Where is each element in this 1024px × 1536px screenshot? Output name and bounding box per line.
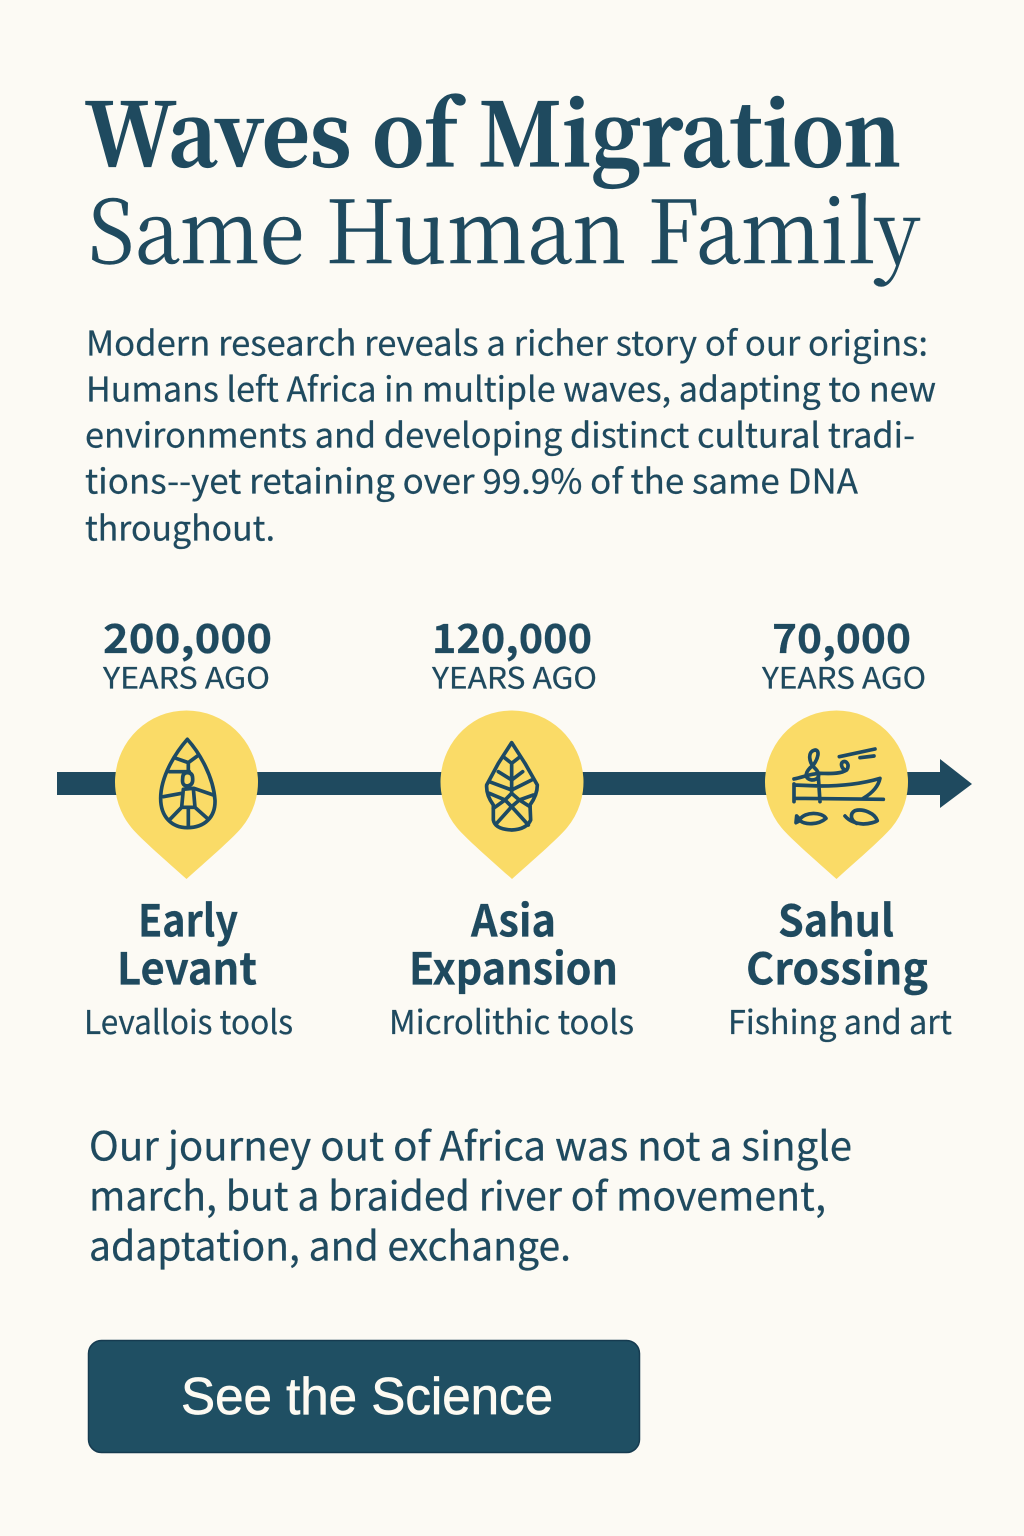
closing statement: adaptation, and exchange. (89, 1214, 571, 1272)
label: Asia Expansion (409, 886, 618, 998)
milestone: Early Levant (84, 607, 293, 1044)
date: 70,000 years ago: YEARS AGO (761, 656, 926, 698)
caption: Microlithic tools: Microlithic tools (389, 996, 634, 1044)
caption: Levallois tools: Levallois tools (84, 996, 293, 1044)
label: Early Levant (117, 886, 257, 998)
closing statement: march, but a braided river of movement, (89, 1164, 826, 1222)
intro text block: Modern research reveals a richer story of our origins: (86, 316, 928, 366)
intro text block (85, 316, 936, 550)
icon: microlithic point (487, 743, 537, 830)
title: Waves of Migration (85, 66, 901, 191)
intro text block: tions--yet retaining over 99.9% of the same DNA (85, 454, 858, 504)
date: 200,000 years ago (102, 607, 272, 698)
pin marker (440, 711, 584, 879)
icon: boat, figure and fish (794, 749, 883, 824)
label: Sahul Crossing: Sahul (778, 886, 894, 950)
closing statement (89, 1114, 852, 1272)
pin marker (115, 711, 258, 879)
title: Same Human Family (88, 163, 921, 288)
intro text block: environments and developing distinct cultural tradi- (85, 408, 915, 458)
milestone: Asia Expansion (389, 607, 634, 1044)
closing statement: Our journey out of Africa was not a single (89, 1114, 852, 1172)
label: Sahul Crossing: Crossing (746, 934, 928, 998)
label: Early Levant: Early (138, 886, 238, 950)
date: 200,000 years ago: 200,000 (103, 607, 272, 665)
timeline arrow (57, 759, 972, 808)
timeline (57, 607, 972, 1044)
date: 120,000 years ago (431, 607, 597, 698)
label: Asia Expansion: Expansion (409, 934, 618, 998)
intro text block: throughout. (85, 502, 275, 550)
intro text block: Humans left Africa in multiple waves, adapting to new (86, 362, 936, 412)
button: See the Science: See the Science (181, 1368, 553, 1426)
icon: Levallois stone tool (161, 739, 215, 828)
label: Sahul Crossing (746, 886, 928, 998)
date: 200,000 years ago: YEARS AGO (102, 656, 270, 698)
date: 70,000 years ago: 70,000 (772, 607, 911, 665)
label: Early Levant: Levant (117, 934, 257, 998)
date: 70,000 years ago (761, 607, 926, 698)
label: Asia Expansion: Asia (470, 886, 556, 950)
caption: Fishing and art: Fishing and art (728, 996, 952, 1044)
date: 120,000 years ago: 120,000 (432, 607, 592, 665)
milestone: Sahul Crossing (728, 607, 952, 1044)
title (85, 66, 921, 288)
button: See the Science (88, 1340, 640, 1452)
date: 120,000 years ago: YEARS AGO (431, 656, 597, 698)
pin marker (765, 711, 908, 879)
